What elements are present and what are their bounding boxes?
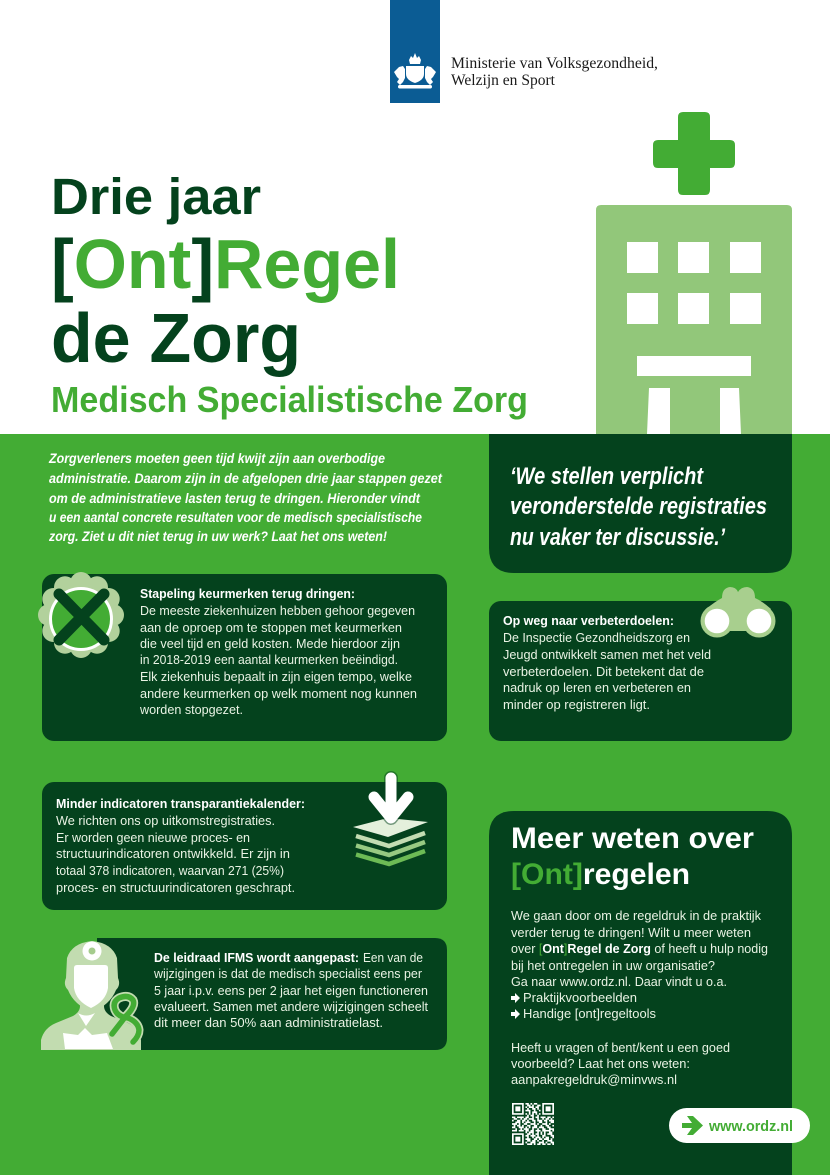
heading: meer weten over ontregelen: Meer weten over [511,822,754,855]
heading: meer weten over ontregelen [511,822,754,891]
text: meer weten body: verder terug te dringen! Wilt u meer weten [511,925,751,940]
panel: indicatoren [42,778,447,910]
panel: leidraad IFMS: De leidraad IFMS wordt aangepast: [154,950,359,965]
heading: meer weten over ontregelen: [Ont]regelen [511,858,690,891]
text: meer weten body: Handige [ont]regeltools [523,1006,656,1021]
intro text: administratie. Daarom zijn in de afgelopen drie jaar stappen gezet [49,470,443,486]
panel: verbeterdoelen: De Inspectie Gezondheidszorg en [503,630,690,645]
panel: keurmerken: Elk ziekenhuis bepaalt in zijn eigen tempo, welke [140,669,412,684]
icon: binoculars [700,587,776,638]
text: meer weten body: Ga naar www.ordz.nl. Daar vindt u o.a. [511,974,727,989]
panel: keurmerken: Stapeling keurmerken terug dringen: [140,586,355,601]
icon: arrow onto layers [353,778,428,864]
text: meer weten body: over [Ont]Regel de Zorg of heeft u hulp nodig [511,941,768,956]
text: meer weten body: voorbeeld? Laat het ons weten: [511,1056,690,1071]
panel: keurmerken: aan de oproep om te stoppen met keurmerken [140,620,402,635]
logo: Rijksoverheid: Ministerie van Volksgezondheid, [451,55,658,72]
icon: doctor with ribbon [41,941,141,1050]
QR code [512,1104,554,1144]
panel: keurmerken: worden stopgezet. [139,702,243,717]
panel: verbeterdoelen: verbeterdoelen. Dit betekent dat de [503,664,704,679]
title [51,168,400,377]
icon: coat of arms [394,53,436,88]
title: [Ont]Regel [51,225,400,303]
panel: keurmerken [38,572,447,741]
icon: green cross [653,112,735,195]
logo: Rijksoverheid: Welzijn en Sport [451,72,556,89]
intro text: zorg. Ziet u dit niet terug in uw werk? Laat het ons weten! [48,528,387,544]
panel: meer weten [489,811,810,1175]
text: meer weten body: Heeft u vragen of bent/kent u een goed [511,1040,730,1055]
panel: leidraad IFMS [41,938,447,1050]
icon: hospital building [596,205,792,434]
subtitle: Medisch Specialistische Zorg [51,379,528,420]
panel: quote: ‘We stellen verplicht [510,463,704,490]
panel: keurmerken: die veel tijd en geld kosten. Mede hierdoor zijn [140,636,400,651]
panel: verbeterdoelen: Jeugd ontwikkelt samen met het veld [503,647,711,662]
panel: leidraad IFMS: evalueert. Samen met andere wijzigingen scheelt [154,999,428,1014]
panel: keurmerken: De meeste ziekenhuizen hebben gehoor gegeven [140,603,415,618]
text: meer weten body: Praktijkvoorbeelden [523,990,637,1005]
button: www.ordz.nl: www.ordz.nl [708,1118,793,1135]
panel: leidraad IFMS: wijzigingen is dat de medisch specialist eens per [153,966,423,981]
panel: quote: nu vaker ter discussie.’ [510,524,725,551]
intro text [48,450,443,544]
panel: indicatoren: Er worden geen nieuwe proces- en [56,830,250,845]
intro text: om de administratieve lasten terug te dringen. Hieronder vindt [49,490,421,506]
panel: verbeterdoelen: minder op registreren ligt. [503,697,650,712]
button: www.ordz.nl [669,1108,810,1143]
intro text: u een aantal concrete resultaten voor de medisch specialistische [49,509,422,525]
text: meer weten body [511,908,768,1087]
panel: indicatoren: totaal 378 indicatoren, waarvan 271 (25%) [56,863,284,878]
panel: leidraad IFMS: 5 jaar i.p.v. eens per 2 jaar het eigen functioneren [154,983,428,998]
panel: quote: veronderstelde registraties [510,493,767,520]
panel: keurmerken: andere keurmerken op welk moment nog kunnen [140,686,417,701]
panel: leidraad IFMS: Een van de [363,950,423,965]
panel: quote [489,434,792,573]
icon: crossed-out seal [38,572,124,658]
panel: indicatoren: structuurindicatoren ontwikkeld. Er zijn in [56,846,290,861]
panel: indicatoren: Minder indicatoren transparantiekalender: [56,796,305,811]
panel: verbeterdoelen: Op weg naar verbeterdoelen: [503,613,674,628]
text: meer weten body: bij het ontregelen in uw organisatie? [511,958,715,973]
panel: verbeterdoelen [489,587,792,741]
text: meer weten body: We gaan door om de regeldruk in de praktijk [511,908,761,923]
title: Drie jaar [51,168,261,225]
logo: Rijksoverheid [390,0,658,103]
panel: keurmerken: in 2018-2019 een aantal keurmerken beëindigd. [140,652,398,667]
panel: leidraad IFMS: dit meer dan 50% aan administratielast. [154,1015,383,1030]
panel: indicatoren: We richten ons op uitkomstregistraties. [56,813,275,828]
panel: indicatoren: proces- en structuurindicatoren geschrapt. [56,880,295,895]
intro text: Zorgverleners moeten geen tijd kwijt zijn aan overbodige [48,450,385,466]
text: meer weten body: aanpakregeldruk@minvws.nl [511,1072,677,1087]
panel: verbeterdoelen: nadruk op leren en verbeteren en [503,680,691,695]
title: de Zorg [51,299,301,377]
